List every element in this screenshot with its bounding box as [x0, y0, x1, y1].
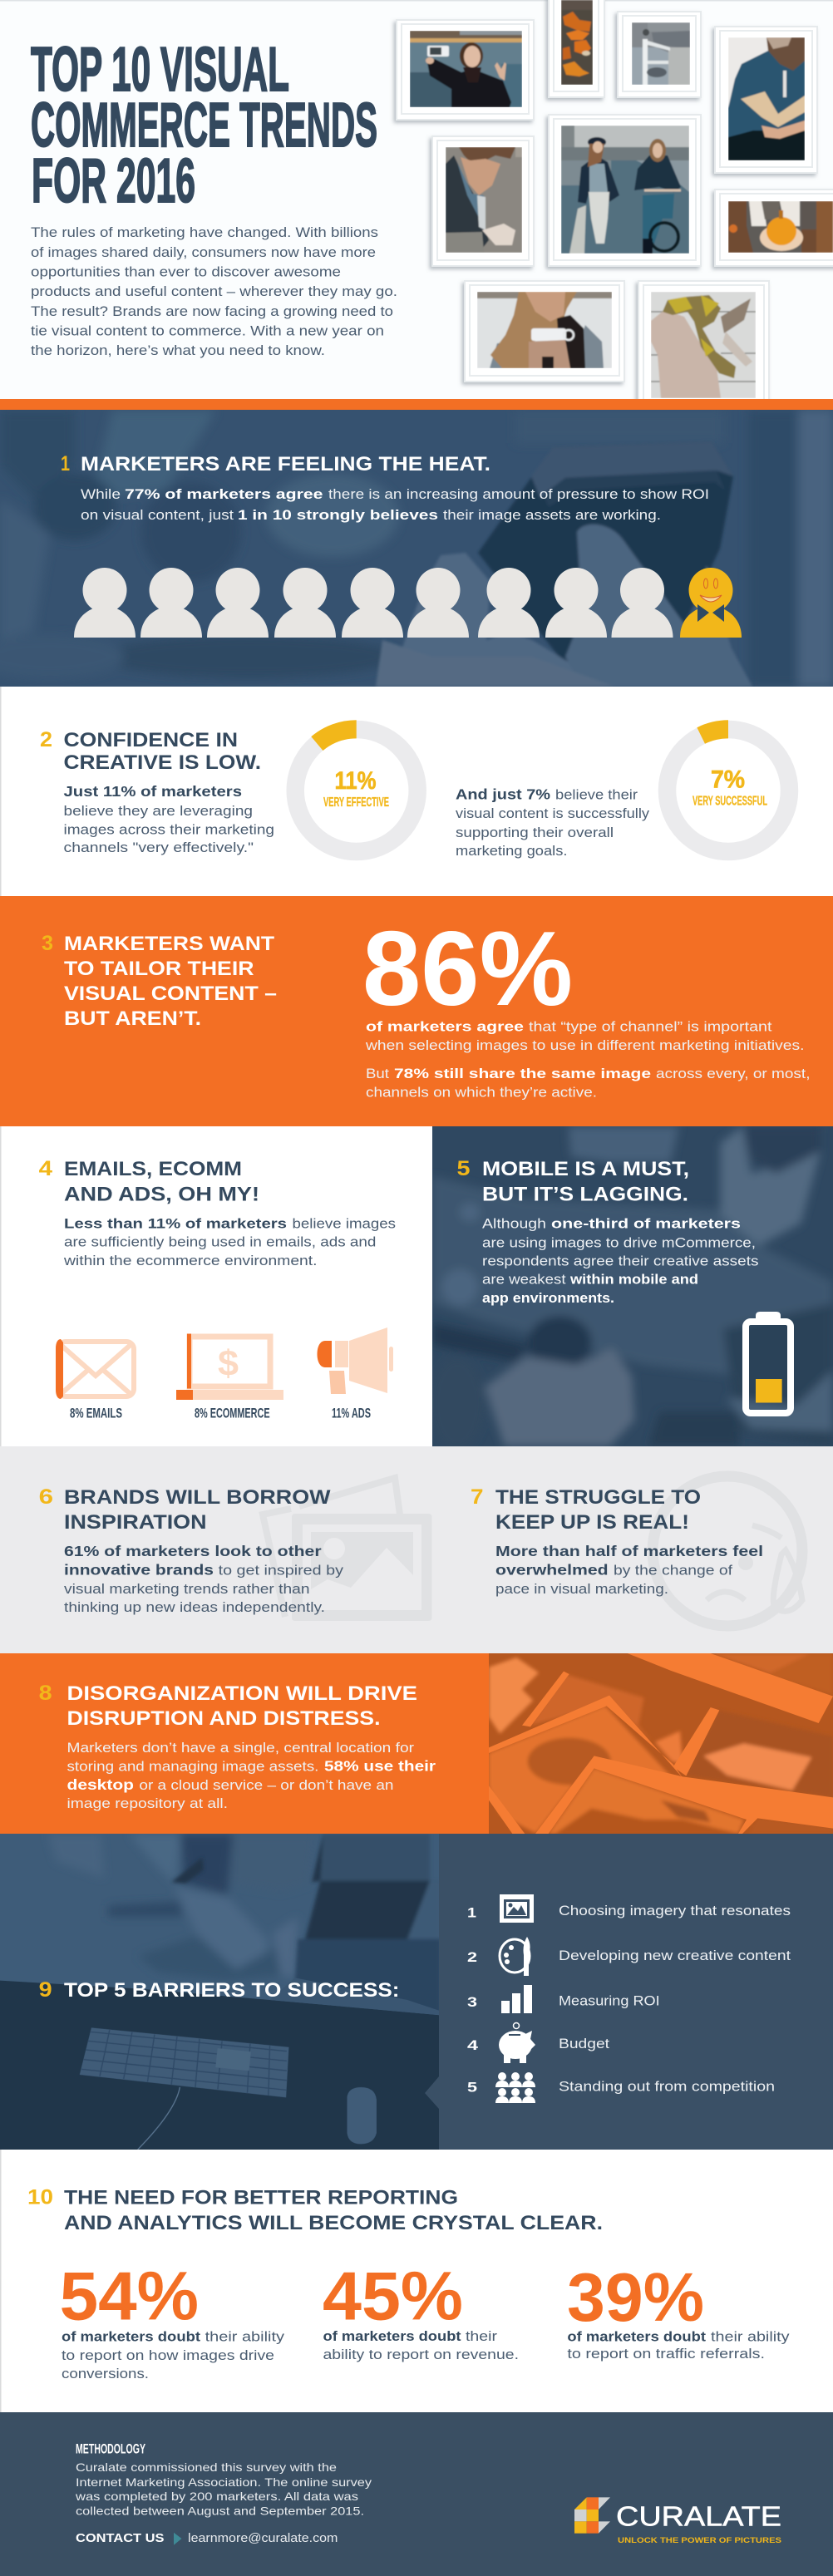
list item 3: Measuring ROI	[559, 1994, 660, 2009]
heading 10: THE NEED FOR BETTER REPORTING	[64, 2187, 458, 2209]
photo frame: bed and blanket	[618, 12, 701, 97]
text block 7: More than half of marketers feel	[495, 1543, 763, 1559]
logo: Curalate: UNLOCK THE POWER OF PICTURES	[618, 2536, 781, 2545]
panel: trend 4	[0, 1126, 432, 1446]
text block 1: on visual content, just	[81, 508, 234, 523]
heading 7: THE STRUGGLE TO	[495, 1486, 701, 1509]
list item 5: Standing out from competition	[559, 2080, 775, 2095]
heading 2: CONFIDENCE IN	[63, 729, 238, 751]
text block: 11%	[63, 783, 274, 855]
stat: 39%	[567, 2258, 790, 2362]
text block 3	[365, 1019, 810, 1101]
title: COMMERCE TRENDS	[31, 90, 377, 160]
panel: trend 1	[0, 410, 833, 687]
background photo: scattered prints	[489, 1653, 833, 1834]
text block 4: believe images	[293, 1216, 396, 1231]
photo frame: man with watch	[432, 136, 534, 266]
photo frame: selfie	[397, 20, 534, 120]
donut chart: 7% very successful	[667, 720, 790, 851]
photo frame: autumn leaves	[549, 0, 604, 97]
text block 6: to get inspired by	[219, 1564, 344, 1579]
text block: 7%	[456, 786, 650, 859]
stat: 54%: conversions.	[62, 2367, 149, 2381]
methodology text: collected between August and September 2015.	[76, 2505, 364, 2518]
text block 6: visual marketing trends rather than	[64, 1582, 309, 1597]
list item 5	[467, 2072, 775, 2103]
icon: watermark pictures	[263, 1478, 432, 1621]
heading 3: MARKETERS WANT	[64, 933, 274, 955]
number 10: 10	[27, 2186, 53, 2209]
icon: laptop 8% ecommerce	[176, 1333, 283, 1421]
text block 3: when selecting images to use in different marketing initiatives.	[365, 1038, 804, 1053]
text block 8: image repository at all.	[67, 1796, 228, 1811]
heading 3: TO TAILOR THEIR	[64, 958, 254, 980]
big stat 86%: 86%	[362, 909, 573, 1027]
number 6: 6	[39, 1485, 53, 1509]
list item 2: Developing new creative content	[559, 1948, 791, 1963]
stat: 45%: their	[466, 2329, 498, 2344]
text block: 7%: visual content is successfully	[456, 806, 650, 821]
heading 5: BUT IT’S LAGGING.	[482, 1184, 688, 1206]
text block 8: or a cloud service – or don’t have an	[139, 1778, 394, 1793]
number 8: 8	[39, 1682, 52, 1705]
methodology text: was completed by 200 marketers. All data was	[75, 2490, 358, 2503]
icon: envelope 8% emails	[56, 1339, 134, 1421]
methodology text: Curalate commissioned this survey with the	[76, 2460, 337, 2474]
photo frame: knit scarf	[638, 281, 769, 406]
heading 10: AND ANALYTICS WILL BECOME CRYSTAL CLEAR.	[64, 2212, 603, 2234]
title: TOP 10 VISUAL	[31, 34, 289, 104]
stat: 54%: to report on how images drive	[62, 2348, 274, 2363]
stat: 45%: ability to report on revenue.	[323, 2347, 519, 2362]
text block 5	[482, 1216, 758, 1306]
donut chart: 11% very effective	[295, 720, 417, 851]
text block 4: within the ecommerce environment.	[63, 1254, 318, 1268]
photo frame: man reading	[715, 27, 817, 173]
text block 5: respondents agree their creative assets	[482, 1254, 758, 1268]
contact line: CONTACT US	[76, 2532, 165, 2545]
text block 6: thinking up new ideas independently.	[64, 1600, 325, 1615]
title: FOR 2016	[32, 145, 195, 215]
text block: 11%: images across their marketing	[63, 823, 274, 838]
text block 4	[63, 1216, 396, 1268]
right list background with notch	[425, 1834, 833, 2150]
heading 6	[64, 1486, 331, 1534]
number 9: 9	[39, 1978, 52, 2002]
panel: trend 8	[0, 1653, 833, 1834]
logo: Curalate	[574, 2497, 781, 2545]
heading 4	[64, 1158, 259, 1206]
icon: smiling yellow person	[680, 568, 742, 638]
heading 8: DISORGANIZATION WILL DRIVE	[67, 1682, 417, 1705]
panel: trend 3	[0, 896, 833, 1126]
donut chart: 7% very successful: VERY SUCCESSFUL	[693, 795, 767, 809]
text block: 7%: marketing goals.	[456, 844, 567, 859]
text block 6	[64, 1543, 344, 1615]
intro text: tie visual content to commerce. With a new year on	[31, 323, 384, 339]
donut chart: 7% very successful: 7%	[711, 766, 745, 794]
text block: 11%: channels "very effectively."	[63, 840, 254, 855]
heading 6: INSPIRATION	[64, 1511, 207, 1534]
text block 6: 61% of marketers look to other	[64, 1543, 322, 1559]
methodology heading: METHODOLOGY	[76, 2441, 145, 2457]
pictogram: 1 in 10 people	[74, 568, 742, 638]
text block 1: 77% of marketers agree	[125, 487, 323, 502]
intro text: opportunities than ever to discover awesome	[31, 264, 341, 279]
background photo: people at table	[432, 1126, 833, 1446]
text block 5: are using images to drive mCommerce,	[482, 1235, 756, 1250]
icon: watermark crying face	[653, 1476, 802, 1626]
panel: trends 6 and 7	[0, 1446, 833, 1653]
text block 1: their image assets are working.	[443, 508, 661, 523]
list item 5: 5	[467, 2081, 477, 2096]
photo frame: street couple	[549, 115, 701, 266]
methodology text	[75, 2460, 372, 2518]
stat: 54%: of marketers doubt	[62, 2330, 201, 2345]
list item 3	[467, 1985, 660, 2013]
text block 1: While	[81, 487, 121, 502]
number 4: 4	[39, 1157, 52, 1180]
icon: envelope 8% emails: 8% EMAILS	[70, 1405, 122, 1421]
heading 9: TOP 5 BARRIERS TO SUCCESS:	[64, 1979, 399, 2002]
logo: Curalate: CURALATE	[616, 2500, 781, 2532]
intro text: products and useful content – wherever they may go.	[31, 283, 397, 299]
intro text: The rules of marketing have changed. With billions	[31, 224, 378, 240]
number 3: 3	[42, 932, 53, 955]
heading 2	[63, 729, 261, 774]
text block 5: are weakest	[482, 1273, 566, 1288]
text block 5: app environments.	[482, 1291, 614, 1306]
text block 5: within mobile and	[569, 1273, 698, 1288]
stat: 39%: to report on traffic referrals.	[567, 2347, 765, 2362]
heading 4: AND ADS, OH MY!	[64, 1184, 259, 1206]
stat: 39%: of marketers doubt	[567, 2330, 707, 2345]
methodology text: Internet Marketing Association. The online survey	[76, 2475, 372, 2489]
intro text: the horizon, here’s what you need to know.	[31, 342, 325, 358]
heading 1: MARKETERS ARE FEELING THE HEAT.	[81, 453, 490, 475]
list item 4: Budget	[559, 2037, 609, 2051]
text block 7	[495, 1543, 763, 1597]
text block 3: But	[366, 1066, 389, 1081]
heading 2: CREATIVE IS LOW.	[63, 751, 261, 774]
text block 1: there is an increasing amount of pressure to show ROI	[328, 487, 709, 502]
stat: 39%: 39%	[567, 2258, 704, 2336]
text block 1: 1 in 10 strongly believes	[238, 508, 438, 523]
heading 6: BRANDS WILL BORROW	[64, 1486, 331, 1509]
heading 7: KEEP UP IS REAL!	[495, 1511, 689, 1534]
text block 1	[81, 487, 709, 523]
heading 3	[64, 933, 277, 1030]
list item 2	[467, 1937, 791, 1976]
text block: 11%: believe they are leveraging	[63, 804, 253, 819]
text block 4: Less than 11% of marketers	[64, 1216, 287, 1231]
text block: 11%: Just 11% of marketers	[63, 783, 242, 800]
stat: 45%: 45%	[323, 2258, 463, 2335]
text block 8: 58% use their	[324, 1758, 436, 1775]
heading 5: MOBILE IS A MUST,	[482, 1158, 689, 1180]
stat: 54%	[60, 2258, 285, 2381]
list item 1	[467, 1894, 791, 1923]
list item 4: 4	[467, 2038, 479, 2053]
list item 1: Choosing imagery that resonates	[559, 1904, 791, 1918]
text block 3: across every, or most,	[656, 1066, 810, 1081]
stat: 45%	[323, 2258, 519, 2362]
stat: 54%: their ability	[205, 2330, 285, 2345]
text block 6: innovative brands	[64, 1562, 214, 1579]
text block 7: pace in visual marketing.	[495, 1582, 668, 1597]
orange divider	[0, 399, 833, 410]
background photo: hand holding phone	[0, 410, 833, 687]
heading 3: BUT AREN’T.	[64, 1007, 201, 1030]
heading 3: VISUAL CONTENT –	[64, 983, 277, 1005]
panel: trend 10	[0, 2150, 833, 2412]
list item 1: 1	[467, 1906, 476, 1921]
heading 4: EMAILS, ECOMM	[64, 1158, 242, 1180]
number 1: 1	[61, 452, 70, 475]
text block 4: are sufficiently being used in emails, ads and	[64, 1235, 376, 1250]
text block: 7%: supporting their overall	[456, 825, 614, 840]
panel: header	[0, 0, 833, 406]
stat: 54%: 54%	[60, 2258, 199, 2335]
title	[31, 34, 377, 215]
text block: 7%: believe their	[555, 788, 638, 803]
text block 3: 78% still share the same image	[394, 1066, 651, 1081]
text block: 7%: And just 7%	[456, 786, 550, 803]
contact line	[76, 2532, 338, 2545]
icon: low battery	[746, 1312, 791, 1413]
number 7: 7	[471, 1485, 484, 1509]
contact line: learnmore@curalate.com	[188, 2532, 338, 2545]
heading 8	[67, 1682, 417, 1730]
text block 5: Although	[482, 1216, 546, 1231]
photo frame: pumpkin	[715, 190, 833, 266]
panel: footer	[0, 2412, 833, 2576]
intro text	[31, 224, 397, 358]
text block 3: that “type of channel” is important	[529, 1019, 772, 1034]
text block 8: Marketers don’t have a single, central location for	[67, 1741, 415, 1756]
donut chart: 11% very effective: VERY EFFECTIVE	[323, 795, 389, 810]
text block 3: channels on which they’re active.	[366, 1086, 597, 1101]
intro text: The result? Brands are now facing a growing need to	[31, 303, 393, 319]
icon: megaphone 11% ads: 11% ADS	[332, 1405, 371, 1421]
background photo: desk and keyboard	[0, 1834, 439, 2150]
icon: laptop 8% ecommerce: 8% ECOMMERCE	[195, 1405, 270, 1421]
text block 5: one-third of marketers	[551, 1216, 741, 1231]
panel: trend 9	[0, 1834, 833, 2150]
number 2: 2	[40, 728, 52, 751]
text block 8	[67, 1741, 436, 1811]
intro text: of images shared daily, consumers now have more	[31, 244, 376, 260]
list item 3: 3	[467, 1995, 477, 2010]
panel: trend 5	[430, 1126, 833, 1451]
heading 5	[482, 1158, 689, 1206]
text block 7: by the change of	[614, 1564, 732, 1579]
heading 8: DISRUPTION AND DISTRESS.	[67, 1707, 381, 1730]
stat: 39%: their ability	[711, 2330, 790, 2345]
icon: megaphone 11% ads	[318, 1327, 393, 1421]
photo frame: woman with mug	[465, 281, 624, 382]
heading 7	[495, 1486, 701, 1534]
text block 8: storing and managing image assets.	[67, 1760, 318, 1775]
text block 8: desktop	[67, 1776, 134, 1793]
stat: 45%: of marketers doubt	[323, 2329, 461, 2344]
number 5: 5	[457, 1157, 471, 1180]
heading 10	[64, 2187, 603, 2234]
list item 4	[467, 2023, 609, 2063]
text block 3: of marketers agree	[366, 1019, 524, 1034]
panel: trend 2	[0, 687, 833, 896]
donut chart: 11% very effective: 11%	[334, 767, 376, 795]
list item 2: 2	[467, 1950, 477, 1965]
text block 7: overwhelmed	[495, 1562, 609, 1579]
icon: laptop 8% ecommerce: $	[218, 1343, 239, 1384]
